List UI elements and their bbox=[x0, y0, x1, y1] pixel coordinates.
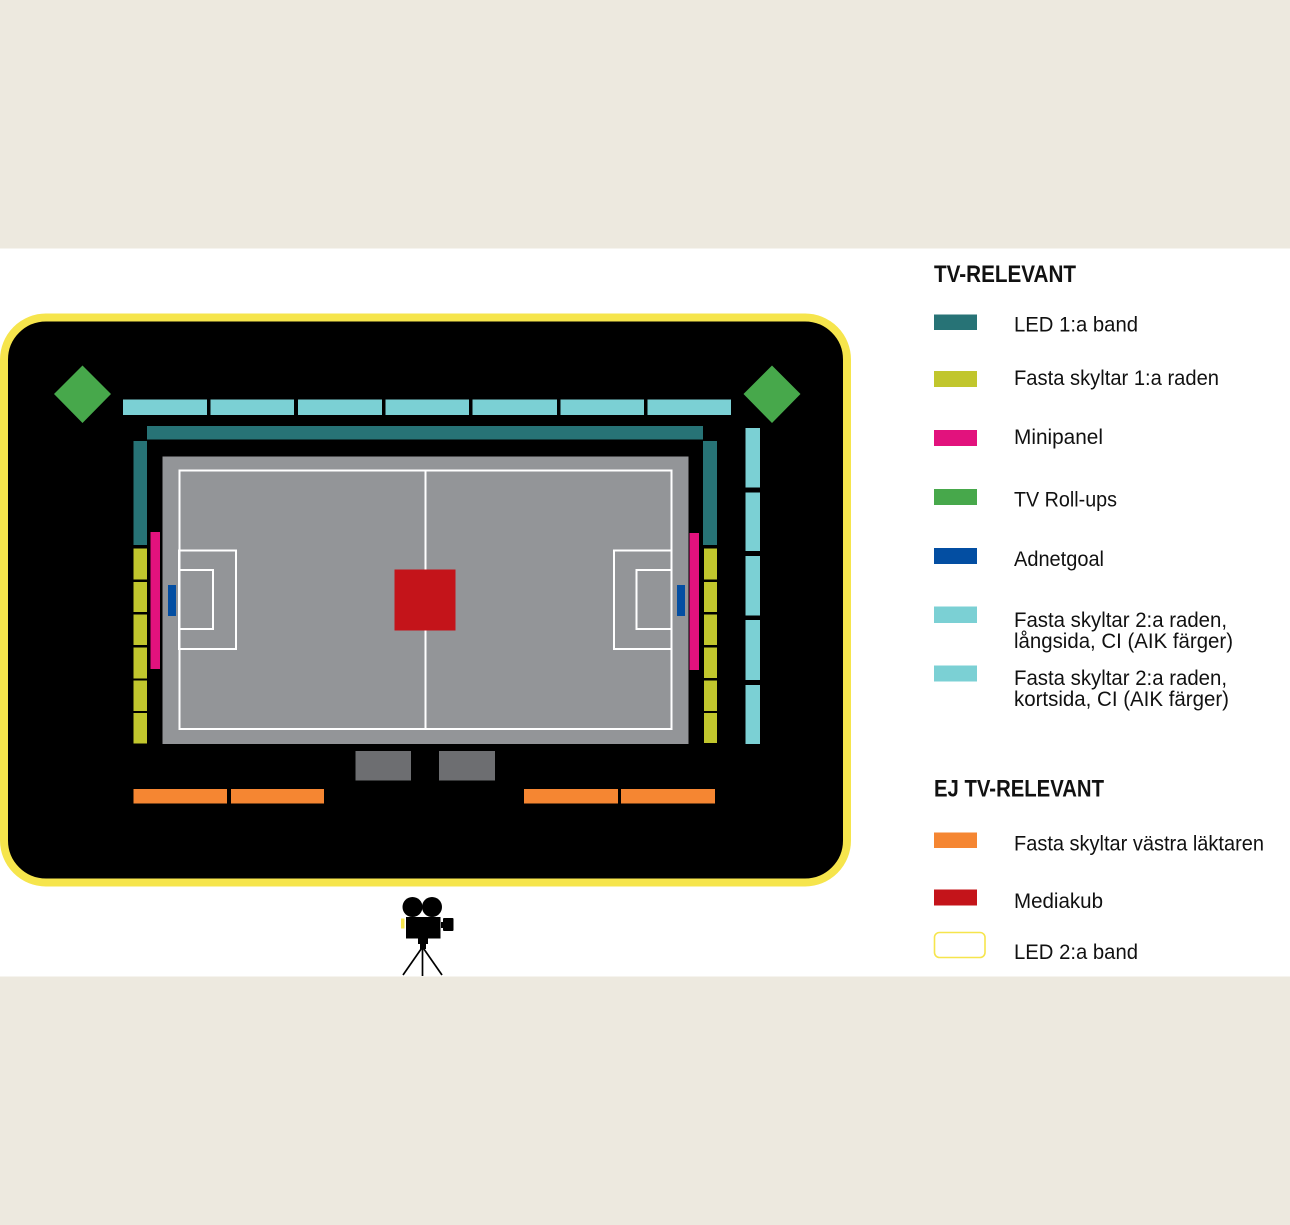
legend item: TV roll-ups: TV Roll-ups bbox=[1014, 488, 1117, 512]
west stand signs: orange boards bbox=[134, 789, 715, 804]
heading: EJ TV-RELEVANT: EJ TV-RELEVANT bbox=[934, 776, 1104, 802]
legend item: Adnetgoal bbox=[934, 547, 1104, 571]
media cube: red square bbox=[394, 570, 456, 630]
LED second band: yellow stadium outline bbox=[4, 318, 847, 882]
legend item: LED first band bbox=[934, 312, 1138, 336]
legend item: second row signs, long side: långsida, CI (AIK färger) bbox=[1014, 629, 1233, 653]
top beige band bbox=[0, 0, 1290, 248]
adnet goals: blue boards bbox=[168, 585, 685, 616]
legend item: Adnetgoal: Adnetgoal bbox=[1014, 547, 1104, 571]
second row signs, long side: top cyan boards bbox=[123, 400, 731, 415]
legend item: LED second band: LED 2:a band bbox=[1014, 940, 1138, 964]
LED first band: teal boards bbox=[134, 426, 717, 545]
legend item: Mediakub bbox=[934, 889, 1103, 913]
legend item: LED first band: LED 1:a band bbox=[1014, 312, 1138, 336]
legend: not TV relevant bbox=[934, 776, 1264, 964]
bottom beige band bbox=[0, 976, 1290, 1225]
first row signs: right olive boards bbox=[704, 548, 717, 743]
legend item: TV roll-ups bbox=[934, 488, 1117, 512]
legend item: second row signs, short side: kortsida, CI (AIK färger) bbox=[1014, 687, 1229, 711]
legend item: minipanel: Minipanel bbox=[1014, 425, 1103, 449]
icon: film camera on tripod bbox=[401, 897, 454, 976]
minipanels: magenta boards bbox=[150, 532, 699, 670]
legend item: second row signs, long side bbox=[934, 606, 1233, 653]
legend item: first row signs bbox=[934, 366, 1219, 390]
legend item: second row signs, long side: Fasta skyltar 2:a raden, bbox=[1014, 608, 1227, 632]
legend: TV relevant bbox=[934, 261, 1233, 711]
legend item: second row signs, short side bbox=[934, 666, 1229, 711]
legend item: LED second band bbox=[934, 932, 1138, 964]
panel: stadium plan bbox=[4, 318, 847, 882]
legend item: west stand signs: Fasta skyltar västra läktaren bbox=[1014, 832, 1264, 856]
football pitch bbox=[162, 456, 688, 744]
heading: TV-RELEVANT: TV-RELEVANT bbox=[934, 261, 1076, 288]
grey blocks below pitch bbox=[356, 751, 495, 780]
legend item: Mediakub: Mediakub bbox=[1014, 889, 1103, 913]
legend item: second row signs, short side: Fasta skyltar 2:a raden, bbox=[1014, 666, 1227, 690]
second row signs, short side: right cyan boards bbox=[746, 428, 760, 744]
legend item: first row signs: Fasta skyltar 1:a raden bbox=[1014, 366, 1219, 390]
TV roll-ups: green diamonds bbox=[54, 366, 800, 423]
legend item: minipanel bbox=[934, 425, 1103, 449]
first row signs: left olive boards bbox=[134, 548, 147, 744]
